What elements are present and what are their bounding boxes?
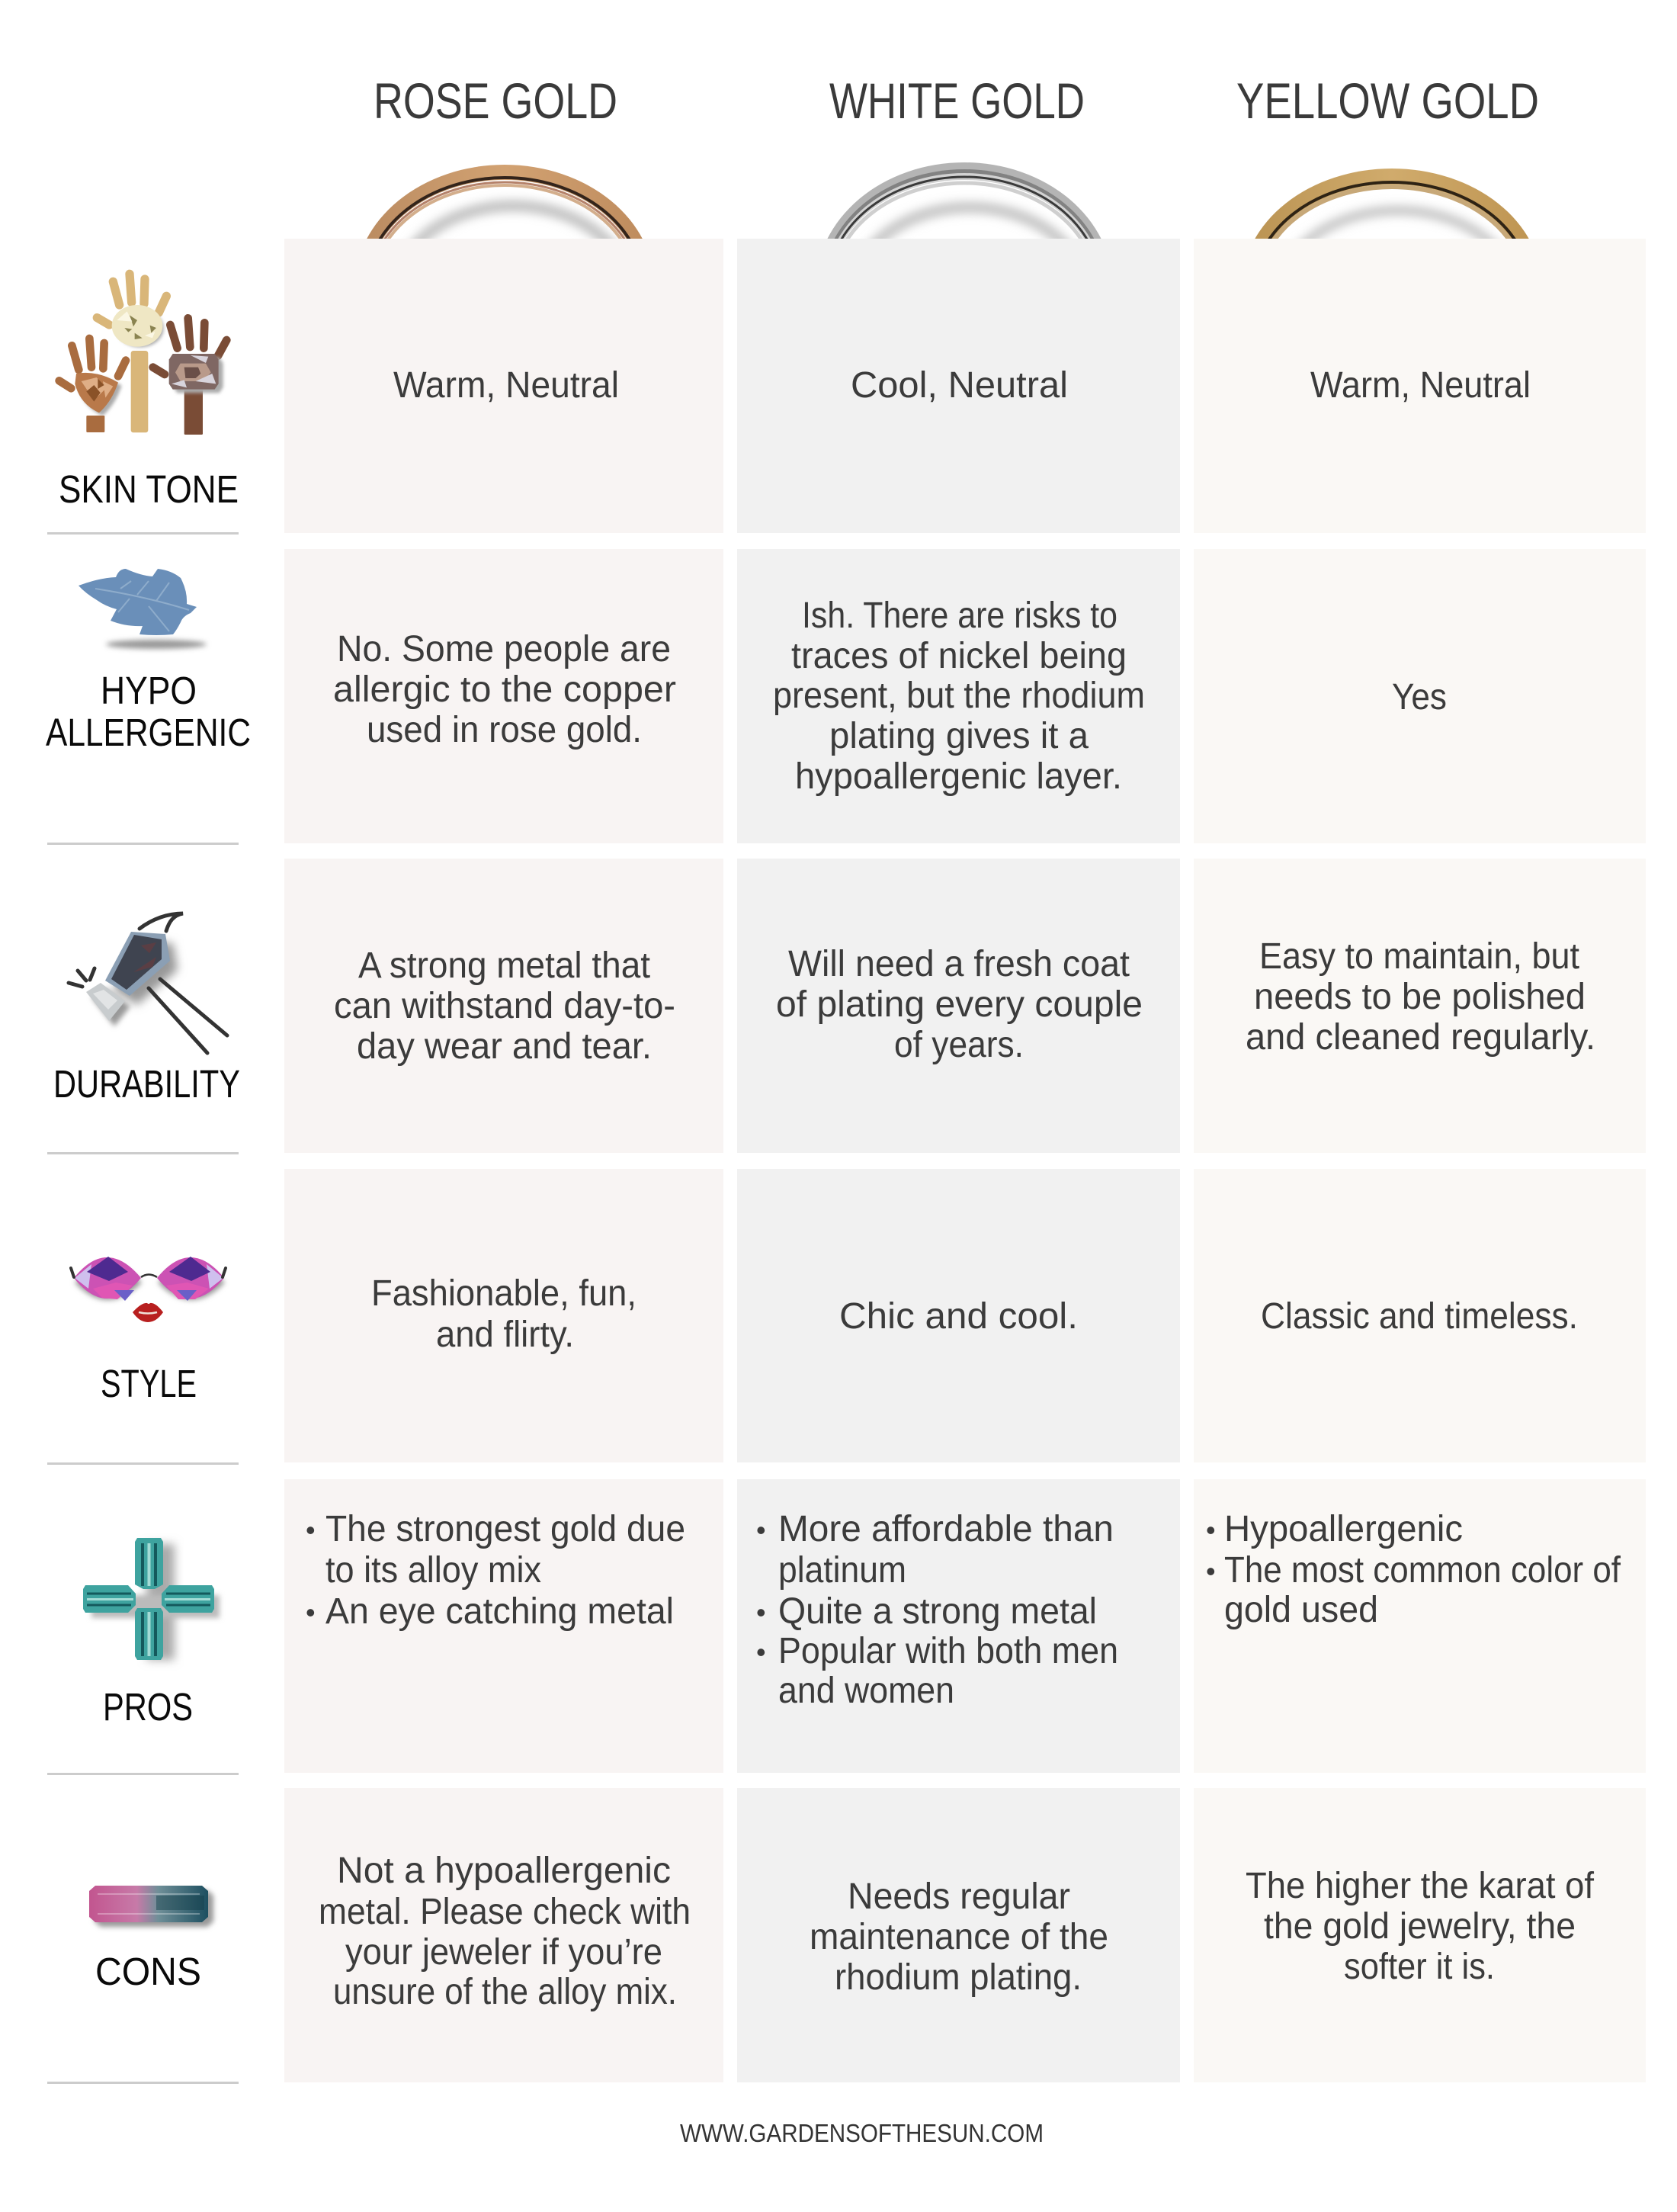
panel: white gold, durability: of plating every couple <box>776 984 1143 1025</box>
panel: white gold, cons: rhodium plating. <box>835 1957 1082 1998</box>
panel: yellow gold, durability: and cleaned regularly. <box>1246 1017 1595 1058</box>
panel: white gold, hypoallergenic: present, but the rhodium <box>773 676 1145 716</box>
panel: yellow gold, cons: The higher the karat of <box>1246 1866 1595 1906</box>
panel: rose gold, cons: your jeweler if you’re <box>345 1932 662 1973</box>
panel: yellow gold, hypoallergenic: Yes <box>1392 677 1447 718</box>
panel: white gold, pros: and women <box>778 1671 954 1711</box>
panel: white gold, cons: Needs regular <box>848 1877 1070 1917</box>
panel: rose gold, durability: can withstand day-to- <box>334 986 675 1026</box>
icon: hammer gem striking crystal <box>69 913 227 1053</box>
heading: rose gold: ROSE GOLD <box>374 72 617 129</box>
heading: yellow gold: YELLOW GOLD <box>1236 72 1539 129</box>
panel: yellow gold, pros: • <box>1206 1555 1216 1587</box>
panel: rose gold, cons: unsure of the alloy mix. <box>333 1972 677 2012</box>
panel: rose gold, style <box>284 1169 723 1462</box>
panel: white gold, cons: maintenance of the <box>810 1917 1108 1957</box>
label: cons: CONS <box>95 1950 201 1993</box>
panel: rose gold, pros <box>284 1479 723 1773</box>
label: hypo allergenic <box>46 669 251 754</box>
icon: plus sign of teal baguette gems <box>83 1538 220 1660</box>
row: hypo allergenic, label and icon <box>46 569 251 754</box>
panel: rose gold, cons: Not a hypoallergenic <box>337 1851 671 1891</box>
panel: rose gold, durability: day wear and tear. <box>357 1026 652 1067</box>
footer: website: WWW.GARDENSOFTHESUN.COM <box>680 2119 1044 2147</box>
panel: white gold, style <box>737 1169 1180 1462</box>
panel: yellow gold, style: Classic and timeless. <box>1261 1296 1578 1337</box>
panel: yellow gold, cons <box>1194 1788 1646 2082</box>
panel: rose gold, cons <box>284 1788 723 2082</box>
panel: rose gold, pros: An eye catching metal <box>325 1591 674 1632</box>
panel: white gold, durability <box>737 859 1180 1153</box>
panel: rose gold, pros: • <box>306 1514 316 1546</box>
panel: white gold, durability: of years. <box>894 1025 1024 1065</box>
panel: white gold, skin tone <box>737 239 1180 533</box>
panel: rose gold, pros: to its alloy mix <box>325 1550 541 1591</box>
ring: yellow gold <box>1255 169 1529 239</box>
panel: rose gold, durability: A strong metal that <box>358 945 650 986</box>
panel: rose gold, style: and flirty. <box>436 1315 574 1355</box>
panel: white gold, hypoallergenic: Ish. There are risks to <box>802 596 1117 636</box>
panel: yellow gold, durability <box>1194 859 1646 1153</box>
panel: rose gold, hypoallergenic: used in rose gold. <box>367 710 642 750</box>
panel: white gold, hypoallergenic: traces of nickel being <box>791 636 1127 676</box>
panel: rose gold, pros: The strongest gold due <box>325 1509 685 1549</box>
ring: rose gold <box>367 165 643 239</box>
panel: rose gold, cons: metal. Please check with <box>319 1892 691 1932</box>
panel: yellow gold, pros: • <box>1206 1514 1216 1546</box>
panel: white gold, pros: Popular with both men <box>778 1631 1118 1671</box>
icon: bicolor tourmaline baguette <box>89 1886 213 1927</box>
panel: yellow gold, cons: softer it is. <box>1344 1947 1495 1987</box>
panel: rose gold, hypoallergenic <box>284 549 723 843</box>
label: skin tone: SKIN TONE <box>59 467 239 511</box>
panel: white gold, pros: Quite a strong metal <box>778 1591 1097 1632</box>
panel: rose gold, skin tone <box>284 239 723 533</box>
panel: white gold, pros: • <box>756 1597 766 1628</box>
label: hypo allergenic: HYPO <box>101 669 197 712</box>
icon: gem sunglasses and lips <box>71 1257 226 1322</box>
panel: yellow gold, pros: Hypoallergenic <box>1224 1509 1463 1549</box>
panel: white gold, hypoallergenic: hypoallergenic layer. <box>795 756 1122 797</box>
panel: rose gold, pros: • <box>306 1597 316 1628</box>
panel: yellow gold, hypoallergenic <box>1194 549 1646 843</box>
label: hypo allergenic: ALLERGENIC <box>46 711 251 754</box>
row: skin tone, label and icon <box>59 274 239 511</box>
row: pros, label and icon <box>83 1538 220 1729</box>
panel: white gold, hypoallergenic <box>737 549 1180 843</box>
panel: rose gold, hypoallergenic: allergic to the copper <box>333 669 676 710</box>
panel: white gold, pros: • <box>756 1636 766 1668</box>
panel: white gold, pros: • <box>756 1514 766 1546</box>
panel: yellow gold, pros: gold used <box>1224 1590 1378 1630</box>
panel: white gold, cons <box>737 1788 1180 2082</box>
panel: yellow gold, durability: Easy to maintain, but <box>1259 936 1579 977</box>
panel: white gold, durability: Will need a fresh coat <box>788 944 1130 984</box>
row: durability, label and icon <box>53 913 240 1106</box>
panel: white gold, hypoallergenic: plating gives it a <box>829 716 1089 756</box>
ring: white gold <box>828 162 1101 239</box>
row: style, label and icon <box>71 1257 226 1405</box>
panel: yellow gold, pros <box>1194 1479 1646 1773</box>
panel: rose gold, skin tone: Warm, Neutral <box>393 365 619 406</box>
icon: three hands with gems <box>59 274 226 435</box>
panel: yellow gold, durability: needs to be polished <box>1254 977 1586 1017</box>
panel: white gold, style: Chic and cool. <box>839 1296 1078 1337</box>
icon: blue leaf gem <box>79 569 207 649</box>
panel: yellow gold, style <box>1194 1169 1646 1462</box>
panel: yellow gold, pros: The most common color of <box>1224 1550 1621 1591</box>
dividers under row labels <box>47 532 239 2084</box>
panel: rose gold, hypoallergenic: No. Some people are <box>337 629 671 669</box>
row: cons, label and icon <box>89 1886 213 1993</box>
panel: yellow gold, cons: the gold jewelry, the <box>1264 1906 1576 1947</box>
panel: rose gold, durability <box>284 859 723 1153</box>
panel: rose gold, style: Fashionable, fun, <box>371 1273 636 1314</box>
label: pros: PROS <box>103 1685 193 1729</box>
panel: yellow gold, skin tone <box>1194 239 1646 533</box>
heading: white gold: WHITE GOLD <box>829 72 1085 129</box>
panel: yellow gold, skin tone: Warm, Neutral <box>1310 365 1531 406</box>
label: style: STYLE <box>101 1362 197 1405</box>
panel: white gold, pros <box>737 1479 1180 1773</box>
panel: white gold, skin tone: Cool, Neutral <box>851 365 1068 406</box>
panel: white gold, pros: More affordable than <box>778 1509 1114 1549</box>
panel: white gold, pros: platinum <box>778 1550 906 1591</box>
label: durability: DURABILITY <box>53 1062 240 1106</box>
